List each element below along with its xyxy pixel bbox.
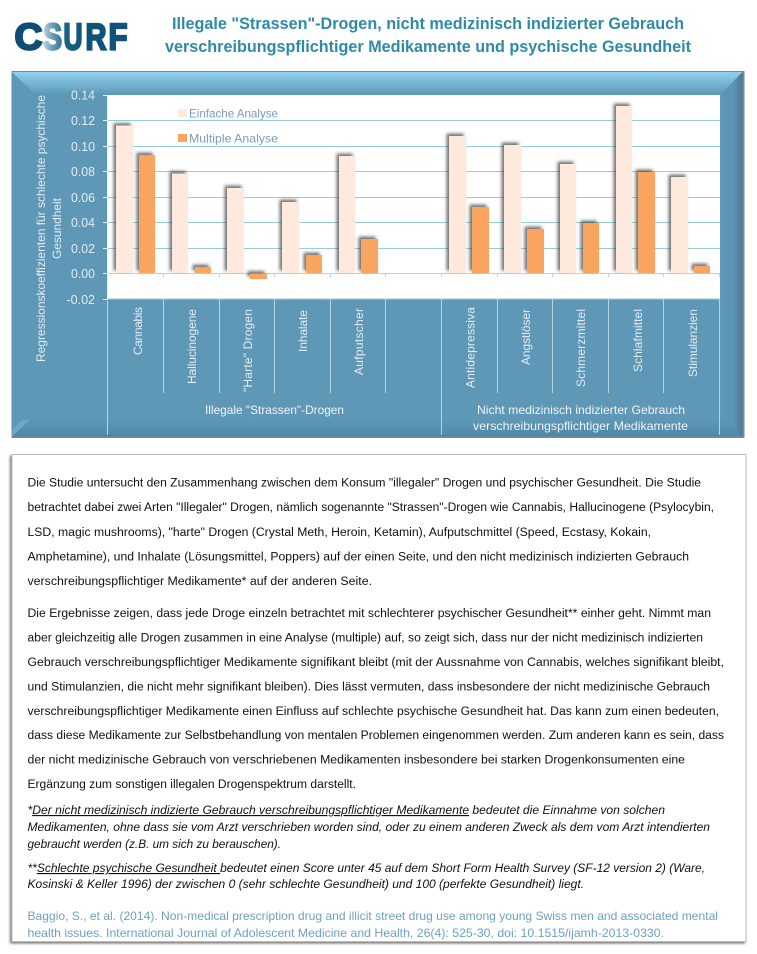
y axis tick labels: 0.04 (71, 215, 95, 230)
legend (178, 106, 278, 146)
y axis tick labels: 0.02 (71, 241, 95, 256)
text panel background (12, 454, 746, 942)
y axis tick labels: -0.02 (66, 292, 95, 307)
footnote: non-medical use definition: gebraucht werden (z.B. um sich zu berauschen). (28, 839, 281, 851)
paragraph: study description: betrachtet dabei zwei Arten "Illegaler" Drogen, nämlich sogenannte "Strassen"-Drogen wie Cannabis, Hallucinogene (Psylocybin, (28, 502, 714, 514)
group label: prescription drugs (473, 403, 688, 433)
logo: CSURF: S (43, 16, 62, 58)
reference (28, 909, 718, 940)
category labels: Angstlöser (519, 309, 533, 365)
gridlines and axes (103, 95, 720, 435)
panel: chart (12, 71, 744, 438)
paragraph: study description (28, 478, 714, 588)
paragraph: study description: Amphetamine), und Inhalate (Lösungsmittel, Poppers) auf der einen Seite, und den nicht medizinisch indizierten Gebrauch (28, 552, 689, 564)
logo: CSURF: F (108, 16, 128, 58)
reference: Baggio, S., et al. (2014). Non-medical prescription drug and illicit street drug use among young Swiss men and associated mental (28, 909, 718, 923)
chart frame (12, 71, 744, 438)
reference: health issues. International Journal of Adolescent Medicine and Health, 26(4): 525-30, doi: 10.1515/ijamh-2013-0330. (28, 926, 664, 940)
footnote: poor mental health definition: **Schlechte psychische Gesundheit bedeutet einen Score unter 45 auf dem Short Form Health Survey (SF-12 version 2) (Ware, (28, 863, 705, 875)
category labels: Cannabis (131, 307, 145, 355)
footnote: non-medical use definition (28, 805, 710, 851)
paragraph: results: Ergänzung zum sonstigen illegalen Drogenspektrum darstellt. (28, 779, 356, 791)
y axis tick labels (66, 88, 95, 307)
logo: CSURF: U (64, 16, 82, 58)
category labels: Antidepressiva (464, 307, 478, 388)
category labels: Hallucinogene (185, 309, 199, 384)
footnote: poor mental health definition: Kosinski & Keller 1996) der zwischen 0 (sehr schlechte Gesundheit) und 100 (perfekte Gesundheit) liegt. (28, 879, 584, 891)
paragraph: study description: Die Studie untersucht den Zusammenhang zwischen dem Konsum "illegaler" Drogen und psychischer Gesundheit. Die Studie (28, 478, 701, 490)
y axis title: Gesundheit (50, 197, 64, 259)
paragraph: results (28, 608, 724, 791)
logo: CSURF: C (14, 16, 42, 58)
title (165, 14, 691, 56)
y axis tick labels: 0.08 (71, 164, 95, 179)
paragraph: results: Gebrauch verschreibungspflichtiger Medikamente signifikant bleibt (mit der Aussnahme von Cannabis, welches signifikant bleibt, (28, 657, 724, 669)
group label: prescription drugs: Nicht medizinisch indizierter Gebrauch (477, 403, 685, 417)
paragraph: results: verschreibungspflichtiger Medikamente einen Einfluss auf schlechte psychische Gesundheit hat. Das kann zum einen bedeuten, (28, 706, 719, 718)
category labels (131, 307, 700, 392)
y axis tick labels: 0.06 (71, 190, 95, 205)
category labels: Schlafmittel (631, 309, 645, 372)
category labels: Schmerzmittel (574, 309, 588, 387)
paragraph: results: dass diese Medikamente zur Selbstbehandlung von mentalen Problemen eingenommen werden. Zum anderen kann es sein, dass (28, 730, 724, 742)
logo: CSURF (14, 16, 128, 58)
category labels: Aufputscher (352, 308, 366, 375)
y axis title: Regressionskoeffizienten für schlechte psychische (34, 95, 48, 362)
footnote: non-medical use definition: Medikamenten, ohne dass sie vom Arzt verschrieben worden sind, oder zu einem anderen Zweck als dem vom Arzt intendierten (28, 822, 710, 834)
legend: Einfache Analyse (189, 106, 278, 120)
y axis title (34, 95, 64, 362)
bars: Einfache Analyse (116, 106, 688, 273)
title: verschreibungspflichtiger Medikamente und psychische Gesundheit (165, 37, 691, 56)
logo: CSURF: R (86, 16, 106, 58)
y axis tick labels: 0.12 (71, 113, 95, 128)
paragraph: results: aber gleichzeitig alle Drogen zusammen in eine Analyse (multiple) auf, so zeigt sich, dass nur der nicht medizinisch indizierten (28, 632, 703, 644)
category labels: Stimulanzien (686, 309, 700, 377)
bars: Multiple Analyse (139, 155, 710, 279)
paragraph: results: und Stimulanzien, die nicht mehr signifikant bleiben). Dies lässt vermuten, dass insbesondere der nicht medizinische Gebrauch (28, 682, 710, 694)
y axis tick labels: 0.14 (71, 88, 95, 102)
footnote: poor mental health definition (28, 863, 705, 891)
category labels: "Harte" Drogen (241, 309, 255, 392)
paragraph: study description: LSD, magic mushrooms), "harte" Drogen (Crystal Meth, Heroin, Ketamin), Aufputschmittel (Speed, Ecstasy, Kokain, (28, 527, 651, 539)
paragraph: results: der nicht medizinische Gebrauch von verschriebenen Medikamenten insbesondere bei starken Drogenkonsumenten eine (28, 754, 685, 766)
panel: text (12, 454, 746, 942)
y axis tick labels: 0.00 (71, 266, 95, 281)
footnote: non-medical use definition: *Der nicht medizinisch indizierte Gebrauch verschreibungspflichtiger Medikamente bedeutet die Einnahme von solchen (28, 805, 665, 817)
paragraph: results: Die Ergebnisse zeigen, dass jede Droge einzeln betrachtet mit schlechterer psychischer Gesundheit** einher geht. Nimmt man (28, 608, 711, 620)
plot area (107, 95, 720, 299)
group label: prescription drugs: verschreibungspflichtiger Medikamente (473, 419, 688, 433)
category labels: Inhalate (296, 310, 310, 352)
legend: Multiple Analyse (189, 132, 278, 146)
title: Illegale "Strassen"-Drogen, nicht medizinisch indizierter Gebrauch (172, 14, 684, 33)
paragraph: study description: verschreibungspflichtiger Medikamente* auf der anderen Seite. (28, 576, 372, 588)
group label: illegal street drugs: Illegale "Strassen"-Drogen (205, 403, 344, 417)
y axis tick labels: 0.10 (71, 139, 95, 154)
